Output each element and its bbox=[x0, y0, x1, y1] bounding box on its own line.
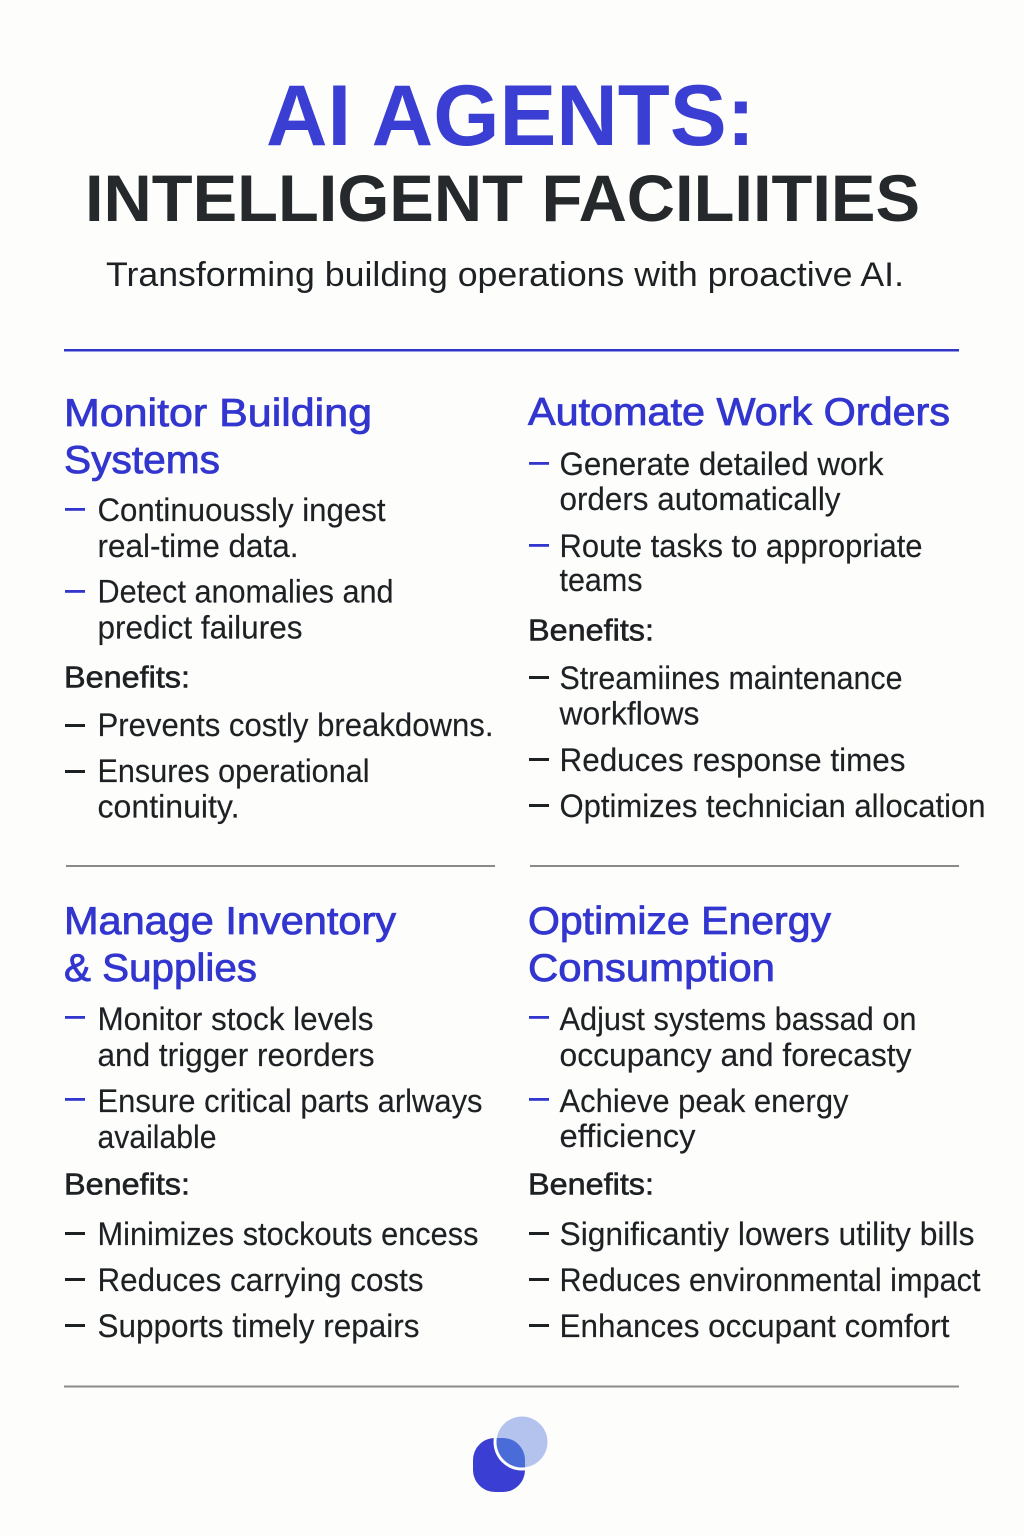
list: inventory features: available bbox=[98, 1119, 216, 1155]
heading: monitor building systems bbox=[64, 392, 372, 482]
heading: monitor building systems: Systems bbox=[64, 439, 220, 482]
list: automate benefits: workflows bbox=[559, 696, 700, 732]
heading: monitor building systems: Monitor Building bbox=[64, 392, 372, 435]
list: monitor features: Detect anomalies and bbox=[98, 574, 394, 610]
list: automate features: Generate detailed work bbox=[560, 446, 884, 482]
list: monitor benefits: continuity. bbox=[98, 788, 240, 824]
title: AI AGENTS: bbox=[266, 68, 755, 164]
icon: overlapping circles logo bbox=[473, 1414, 550, 1492]
list: automate features bbox=[529, 446, 922, 598]
list: inventory features: and trigger reorders bbox=[98, 1037, 374, 1073]
list: monitor features bbox=[65, 492, 394, 646]
list: automate benefits bbox=[529, 660, 986, 824]
heading: manage inventory and supplies: & Supplies bbox=[64, 947, 257, 990]
heading: automate work orders: Automate Work Orders bbox=[528, 391, 950, 434]
heading: optimize energy consumption bbox=[528, 900, 832, 990]
panel: manage inventory and supplies bbox=[64, 900, 482, 1344]
list: automate benefits: Reduces response times bbox=[560, 742, 906, 778]
subtitle: INTELLIGENT FACILIITIES bbox=[85, 161, 920, 235]
list: inventory benefits: Supports timely repairs bbox=[98, 1308, 420, 1344]
list: monitor benefits bbox=[65, 707, 494, 824]
list: automate features: Route tasks to appropriate bbox=[560, 528, 922, 564]
list: monitor benefits: Ensures operational bbox=[98, 753, 370, 789]
list: automate features: teams bbox=[560, 562, 642, 598]
heading: optimize energy consumption: Optimize Energy bbox=[528, 900, 832, 943]
list: energy features: efficiency bbox=[560, 1118, 696, 1154]
panel: automate work orders bbox=[528, 391, 986, 824]
benefits heading: Benefits: bbox=[64, 660, 190, 694]
heading: optimize energy consumption: Consumption bbox=[528, 947, 775, 990]
list: energy features bbox=[529, 1001, 916, 1154]
list: monitor features: real-time data. bbox=[98, 528, 298, 564]
list: automate benefits: Streamiines maintenance bbox=[560, 660, 902, 696]
heading: manage inventory and supplies: Manage Inventory bbox=[64, 900, 397, 943]
list: inventory features: Ensure critical parts arlways bbox=[98, 1083, 482, 1119]
list: monitor features: predict failures bbox=[98, 610, 302, 646]
benefits heading: Benefits: bbox=[528, 612, 654, 648]
list: energy benefits: Reduces environmental impact bbox=[560, 1262, 981, 1298]
list: automate features: orders automatically bbox=[560, 481, 840, 517]
list: inventory benefits: Reduces carrying costs bbox=[98, 1262, 424, 1298]
panel: optimize energy consumption bbox=[528, 900, 981, 1344]
list: inventory features bbox=[65, 1001, 482, 1155]
list: energy benefits: Enhances occupant comfort bbox=[560, 1308, 950, 1344]
list: inventory benefits: Minimizes stockouts encess bbox=[98, 1216, 478, 1252]
benefits heading: Benefits: bbox=[528, 1166, 654, 1202]
list: energy benefits bbox=[529, 1216, 981, 1344]
list: monitor benefits: Prevents costly breakdowns. bbox=[98, 707, 494, 743]
panel: monitor building systems bbox=[64, 392, 494, 824]
tagline: Transforming building operations with proactive AI. bbox=[106, 256, 904, 294]
list: inventory benefits bbox=[65, 1216, 478, 1344]
list: energy features: occupancy and forecasty bbox=[560, 1037, 912, 1073]
list: energy benefits: Significantiy lowers utility bills bbox=[560, 1216, 974, 1252]
list: automate benefits: Optimizes technician allocation bbox=[560, 788, 986, 824]
list: energy features: Achieve peak energy bbox=[560, 1083, 848, 1119]
list: monitor features: Continuoussly ingest bbox=[98, 492, 386, 528]
heading: manage inventory and supplies bbox=[64, 900, 397, 990]
list: inventory features: Monitor stock levels bbox=[98, 1001, 374, 1037]
benefits heading: Benefits: bbox=[64, 1166, 190, 1202]
list: energy features: Adjust systems bassad on bbox=[560, 1001, 916, 1037]
